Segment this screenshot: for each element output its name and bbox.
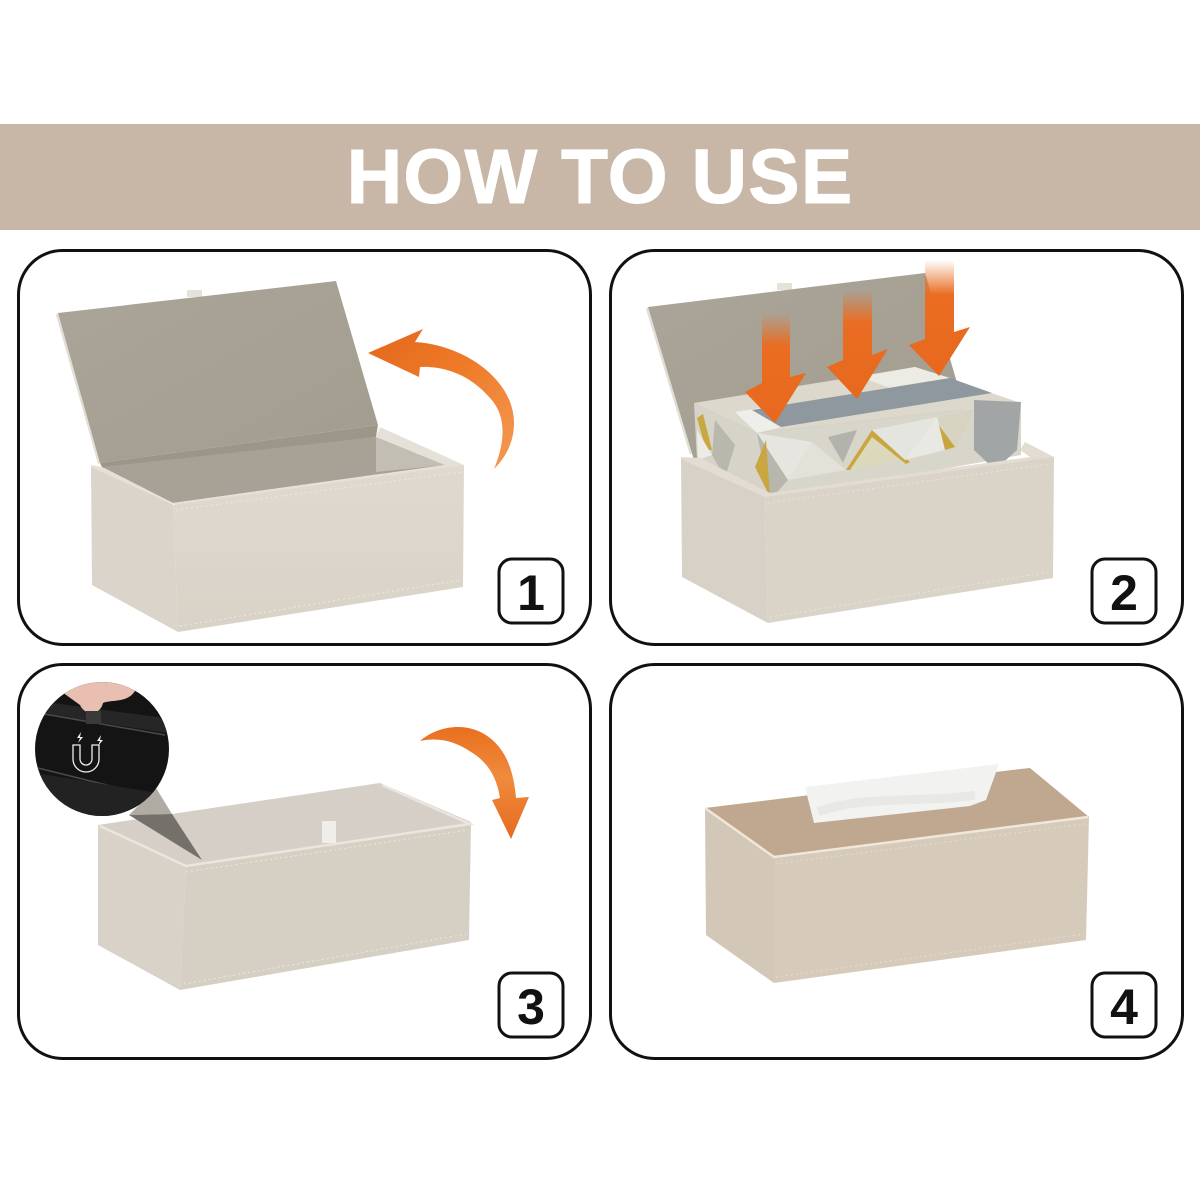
arrow: down left: [745, 313, 806, 423]
step number 3: 3: [517, 979, 545, 1035]
title: HOW TO USE: [347, 134, 853, 220]
step number 2: 2: [1110, 565, 1138, 621]
step number 4: 4: [1110, 979, 1138, 1035]
icon: open box with tissue pack: [646, 273, 1054, 623]
step number 1: [499, 559, 563, 623]
step number 3: [499, 973, 563, 1037]
arrow: down center: [827, 290, 888, 399]
arrow: down right: [909, 260, 970, 376]
panel: step 1 open the lid: [18, 250, 590, 644]
callout: magnified magnet closure: [30, 680, 202, 860]
step number 4: [1092, 973, 1156, 1037]
panel: step 2 insert tissue box: [610, 250, 1182, 644]
icon: closed box with magnet tab: [98, 783, 471, 990]
arrow: close lid: [420, 727, 529, 839]
arrow: lift lid: [368, 329, 514, 469]
panel: step 3 close the lid: [18, 664, 590, 1058]
step number 2: [1092, 559, 1156, 623]
header banner: [0, 124, 1200, 230]
infographic canvas: [0, 124, 1200, 1060]
tissue pack: [694, 367, 1021, 500]
icon: finished tissue box: [705, 764, 1089, 983]
panel: step 4 finished: [610, 664, 1182, 1058]
tissue: [805, 764, 999, 823]
icon: open box step 1: [56, 281, 464, 632]
step number 1: 1: [517, 565, 545, 621]
